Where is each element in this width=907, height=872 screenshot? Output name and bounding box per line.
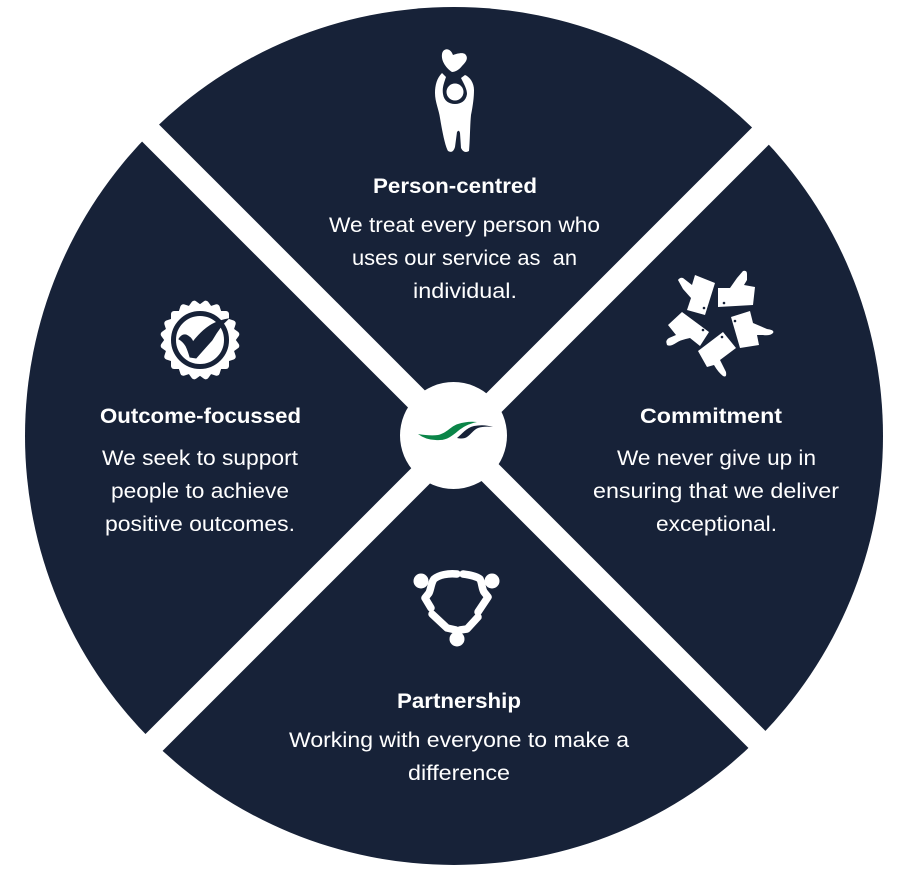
- text: commitment description: [593, 447, 839, 536]
- text: commitment description: We never give up in: [617, 447, 816, 470]
- centre logo: [400, 382, 507, 489]
- text: outcome-focussed description: [102, 447, 298, 536]
- heading: partnership: Partnership: [397, 690, 521, 713]
- icon: ring of thumbs: [666, 271, 773, 376]
- text: commitment description: exceptional.: [656, 513, 777, 536]
- heading: outcome-focussed: Outcome-focussed: [100, 405, 301, 428]
- text: partnership description: difference: [408, 762, 510, 785]
- panel: outcome-focussed: [100, 299, 301, 536]
- text: commitment description: ensuring that we deliver: [593, 480, 839, 503]
- heading: person-centred: Person-centred: [373, 175, 537, 198]
- panel: commitment: [593, 271, 839, 536]
- text: outcome-focussed description: people to achieve: [111, 480, 289, 503]
- heading: commitment: Commitment: [640, 405, 782, 428]
- panel: partnership: [289, 574, 629, 785]
- text: outcome-focussed description: We seek to support: [102, 447, 298, 470]
- icon: check badge: [159, 299, 241, 381]
- icon: person holding heart: [435, 49, 474, 152]
- icon: three people linked in a ring: [414, 574, 500, 646]
- text: partnership description: [289, 729, 629, 785]
- panel: person-centred: [329, 49, 600, 303]
- text: person-centred description: individual.: [413, 280, 517, 303]
- text: outcome-focussed description: positive outcomes.: [105, 513, 295, 536]
- text: person-centred description: [329, 214, 600, 303]
- text: person-centred description: We treat every person who: [329, 214, 600, 237]
- text: person-centred description: uses our service as an: [352, 247, 577, 270]
- text: partnership description: Working with everyone to make a: [289, 729, 629, 752]
